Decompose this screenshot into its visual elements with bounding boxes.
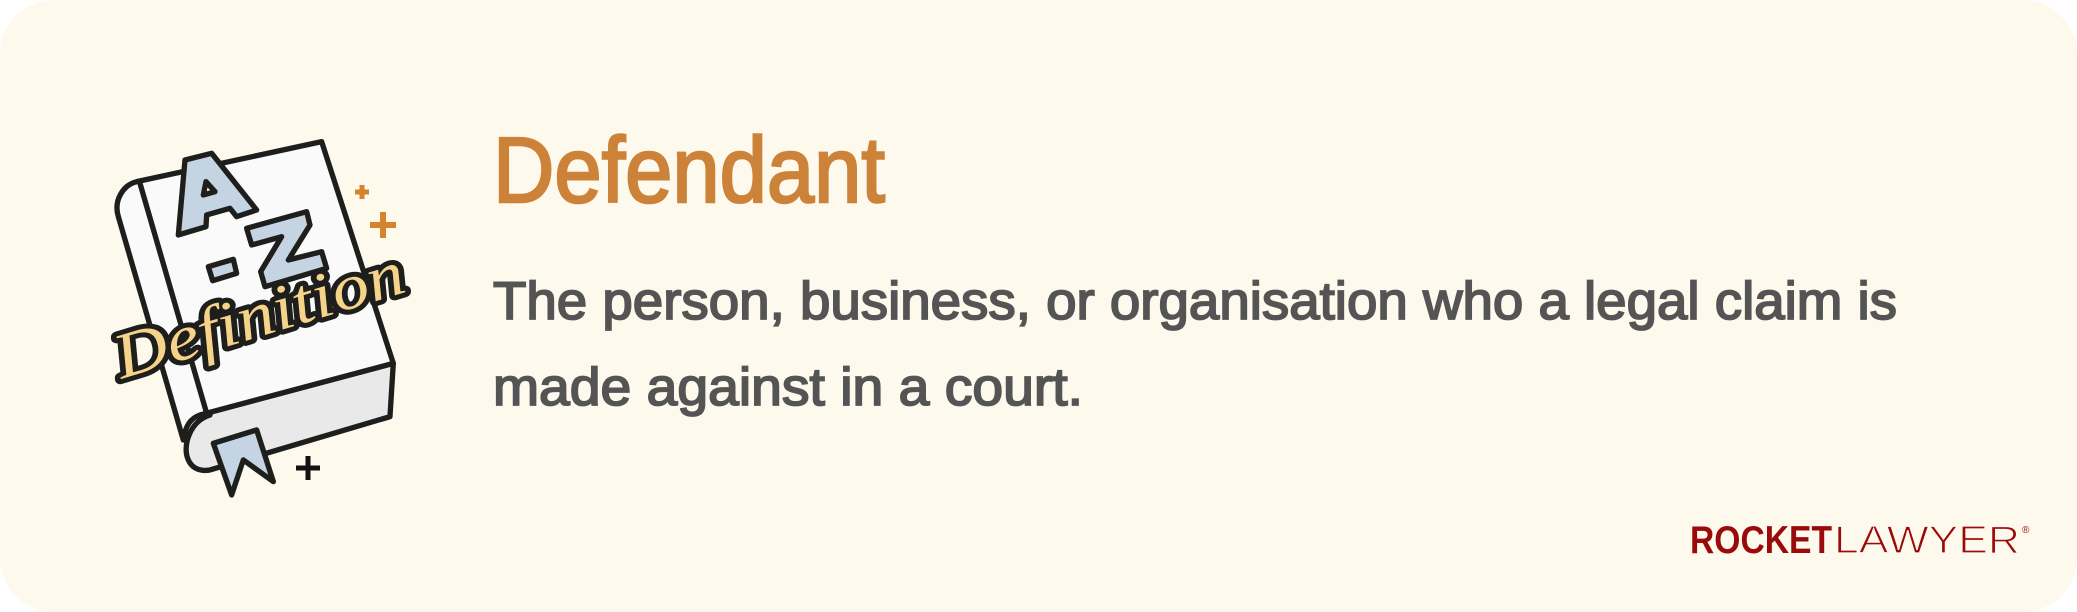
title: Defendant	[493, 118, 885, 222]
logo: Rocket Lawyer: ROCKET	[1690, 519, 1832, 562]
body text: The person, business, or organisation who a legal claim is	[493, 272, 1897, 331]
dash	[208, 259, 237, 281]
icon: Definition script: Definition	[104, 237, 413, 393]
bookmark	[213, 430, 273, 495]
cover	[117, 142, 393, 440]
letter Z	[247, 212, 327, 287]
logo: Rocket Lawyer: LAWYER	[1834, 519, 2020, 562]
body text	[493, 272, 1897, 417]
body text: made against in a court.	[493, 358, 1083, 417]
icon: A-Z definition book	[117, 142, 393, 495]
spine line	[140, 183, 207, 413]
page block	[186, 363, 393, 470]
icon: sparkles	[296, 185, 396, 480]
letter A	[178, 153, 257, 235]
logo: Rocket Lawyer: ®	[2022, 525, 2030, 536]
logo: Rocket Lawyer	[1690, 519, 2030, 562]
